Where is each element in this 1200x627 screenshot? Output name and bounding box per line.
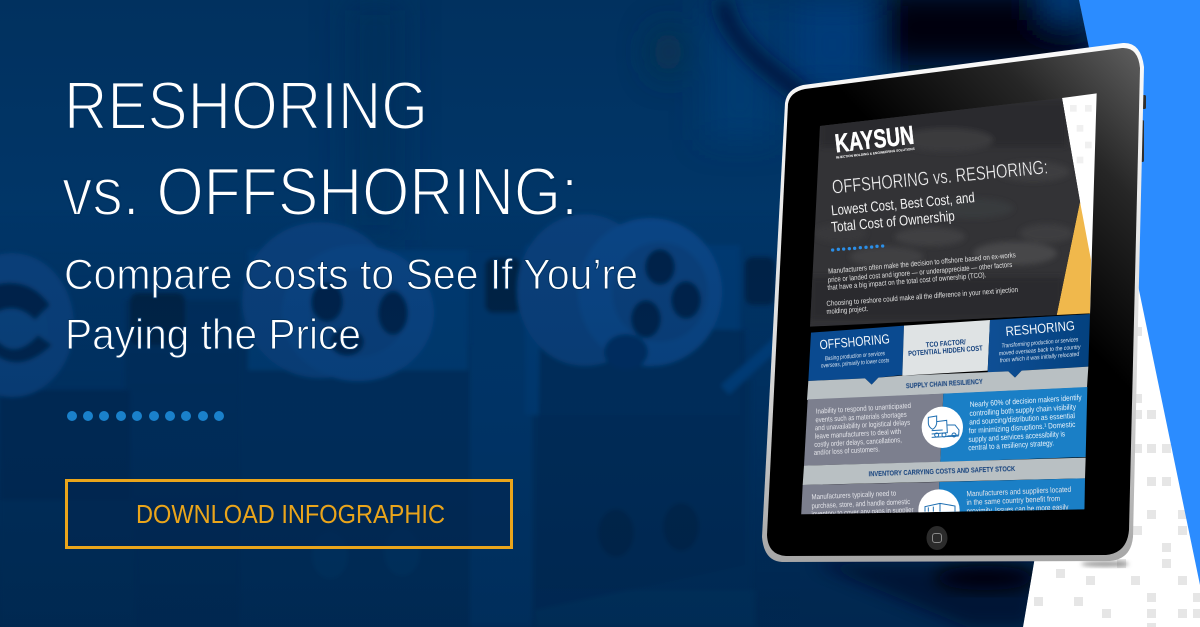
panel: offshoring supply chain text: events such as materials shortages [815, 410, 907, 424]
panel: reshoring supply chain text: for minimizing disruptions.¹ Domestic [969, 420, 1076, 435]
tablet title [831, 157, 1049, 236]
logo: KAYSUN: KAYSUN [833, 120, 916, 158]
subheading [64, 251, 638, 359]
panel: offshoring header: overseas, primarily to lower costs [821, 358, 890, 370]
panel: reshoring supply chain text: supply and services accessibility is [968, 429, 1065, 444]
tablet intro paragraph: that have a big impact on the total cost of ownership (TCO). [827, 270, 987, 292]
panels: inventory cut-off row: in the same country benefit from [966, 494, 1060, 507]
panel: reshoring header [988, 314, 1090, 378]
button: download infographic [66, 480, 512, 548]
lower holes and screws [600, 511, 632, 555]
centre pulley [241, 222, 376, 379]
heading: RESHORING vs. OFFSHORING: vs. OFFSHORING: [62, 154, 578, 230]
tablet title: Lowest Cost, Best Cost, and [831, 190, 975, 219]
white triangle with dots [1062, 93, 1097, 315]
tablet right contact shadow [1081, 561, 1129, 567]
panel: offshoring header [808, 326, 904, 385]
subheading: Compare Costs to See If You’re [64, 251, 638, 299]
panel: TCO factor header: TCO FACTOR/ [925, 337, 966, 349]
yellow triangle [1057, 202, 1091, 315]
logo: KAYSUN: INJECTION MOLDING & ENGINEERING SOLUTIONS [836, 147, 916, 160]
panel: reshoring header: Transforming production or services [1001, 337, 1079, 350]
panel: offshoring supply chain text: leave manufacturers to deal with [815, 427, 901, 441]
tablet intro paragraph: molding project. [826, 304, 868, 316]
bezel [767, 48, 1140, 556]
panel: reshoring supply chain text: Nearly 60% of decision makers identify [970, 393, 1082, 409]
button: download infographic: DOWNLOAD INFOGRAPHIC [136, 499, 445, 529]
block shapes [128, 302, 238, 349]
band: inventory carrying costs: INVENTORY CARRYING COSTS AND SAFETY STOCK [868, 464, 1016, 478]
tablet intro paragraph: Manufacturers often make the decision to offshore based on ex-works [828, 250, 1016, 276]
navy tint over photo [0, 210, 800, 627]
band: inventory carrying costs [803, 458, 1086, 485]
panel: offshoring header: OFFSHORING [819, 331, 890, 352]
panels: inventory cut-off row: Manufacturers and suppliers located [966, 485, 1071, 498]
tablet title: OFFSHORING vs. RESHORING: [831, 157, 1049, 199]
bright blue corner triangle [1079, 0, 1200, 585]
band: supply chain resiliency [807, 367, 1088, 400]
panel: offshoring supply chain text [804, 394, 943, 466]
panels: inventory cut-off row: Manufacturers typically need to [811, 488, 896, 501]
panels: inventory cut-off row: purchase, store, and handle domestic [811, 497, 911, 510]
panel: offshoring supply chain text: costly order delays, cancellations, [814, 435, 902, 449]
right pulley [514, 214, 620, 367]
shadow under tablet [815, 563, 1040, 627]
connecting rods [130, 293, 185, 345]
pattern of pale grey squares [1034, 327, 1200, 627]
tablet intro paragraph [826, 250, 1018, 316]
screen upper half [810, 93, 1097, 327]
tablet intro paragraph: price or landed cost and ignore — or underappreciate — other factors [827, 260, 1013, 284]
panel: offshoring header: Basing production or services [825, 351, 885, 362]
panel: offshoring supply chain text: and/or loss of customers. [814, 444, 880, 457]
panel: reshoring supply chain text: central to a resiliency strategy. [968, 438, 1054, 452]
heading: RESHORING vs. OFFSHORING: RESHORING [64, 68, 428, 144]
panel: offshoring supply chain text: and unavailability or logistical delays [815, 418, 911, 432]
band: supply chain resiliency: SUPPLY CHAIN RESILIENCY [906, 377, 983, 390]
panels: inventory cut-off row: proximity. Issues can be more easily [966, 502, 1069, 516]
panel: offshoring supply chain text: Inability to respond to unanticipated [816, 401, 911, 416]
heading: RESHORING vs. OFFSHORING [62, 68, 578, 230]
tablet intro paragraph: Choosing to reshore could make all the difference in your next injection [826, 285, 1018, 308]
panel: reshoring supply chain text [940, 387, 1087, 462]
panel: reshoring header: RESHORING [1005, 318, 1075, 339]
screen lower half [801, 314, 1090, 531]
left pulley [0, 253, 74, 397]
panel: TCO factor header [902, 320, 990, 376]
panel: reshoring supply chain text: controlling both supply chain visibility [969, 402, 1076, 418]
tablet dots [831, 244, 884, 252]
dotted divider [67, 411, 224, 421]
panel: reshoring header: from which it was initially relocated [1000, 352, 1080, 364]
logo: KAYSUN [833, 120, 916, 160]
panels: inventory cut-off row: inventory to cover any gaps in supplier [811, 505, 914, 518]
panel: reshoring header: moved overseas back to the country [999, 345, 1082, 357]
panel: reshoring supply chain text: and sourcing/distribution as essential [969, 411, 1075, 427]
tablet title: Total Cost of Ownership [831, 209, 956, 236]
silver tablet frame [762, 43, 1144, 562]
panel: TCO factor header: POTENTIAL HIDDEN COST [908, 343, 983, 358]
subheading: Paying the Price [65, 311, 361, 359]
dark cover photo [810, 98, 1080, 327]
tablet device [762, 43, 1146, 562]
panels: inventory cut-off row [801, 478, 1085, 514]
home button [926, 526, 948, 550]
side buttons [1140, 95, 1146, 162]
icon: truck and shield [922, 407, 963, 448]
